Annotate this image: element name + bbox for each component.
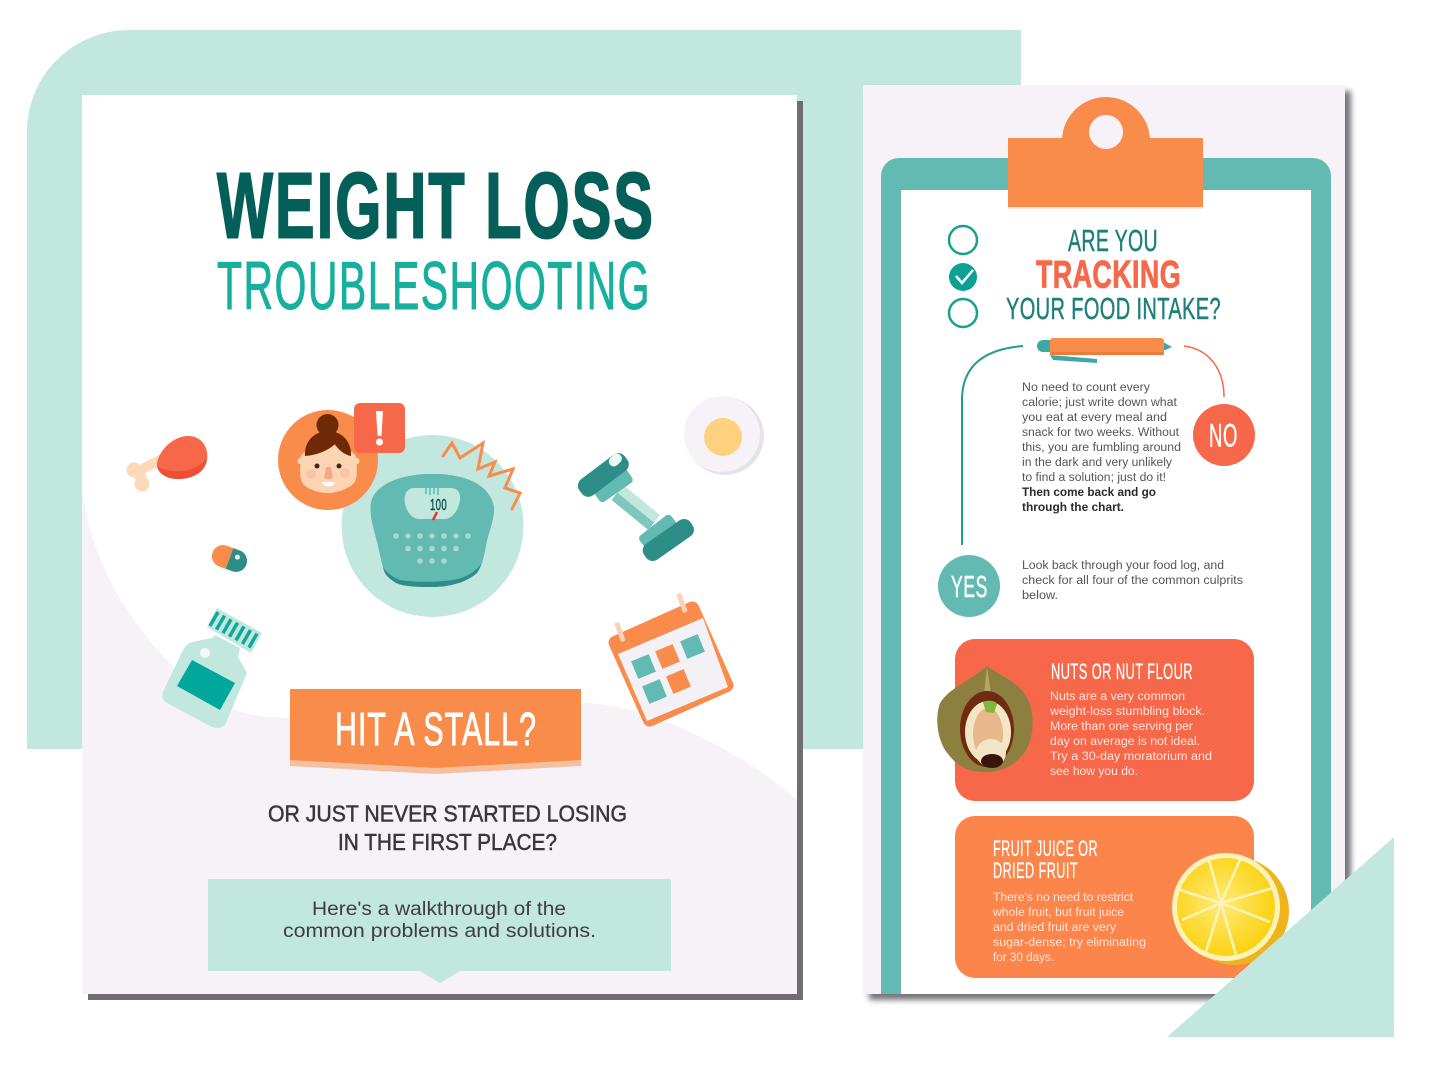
text: yes answer instructions [1022, 560, 1243, 602]
icon: fried egg [684, 396, 764, 475]
banner: hit a stall [290, 689, 581, 774]
icon: scale backdrop disc [342, 435, 524, 617]
text: no answer instructions: No need to count every [1022, 382, 1150, 394]
heading: are you tracking: ARE YOU [1068, 223, 1158, 258]
subheading: IN THE FIRST PLACE? [338, 829, 557, 855]
badge: yes: YES [951, 569, 988, 604]
title: TROUBLESHOOTING [217, 248, 651, 324]
arrow: no branch [1184, 346, 1224, 397]
text: no answer instructions: snack for two weeks. Without [1022, 427, 1180, 439]
title: WEIGHT LOSS [217, 154, 655, 258]
icon: zigzag shake [443, 443, 520, 509]
checklist icons [949, 226, 977, 327]
card: fruit juice or dried fruit: for 30 days. [993, 952, 1054, 964]
callout: walkthrough note: common problems and solutions. [283, 921, 596, 942]
icon: alert badge [354, 403, 405, 453]
arrow: yes branch [962, 346, 1023, 545]
subheading [268, 800, 627, 855]
heading: are you tracking: YOUR FOOD INTAKE? [1006, 291, 1221, 326]
icon: calendar [606, 593, 736, 729]
text: no answer instructions: Then come back and go [1022, 487, 1156, 499]
card: fruit juice or dried fruit: sugar-dense; try eliminating [993, 937, 1146, 949]
text: no answer instructions: to find a solution; just do it! [1022, 472, 1166, 484]
text: yes answer instructions: Look back through your food log, and [1022, 560, 1224, 572]
heading: are you tracking [1006, 223, 1221, 326]
card: nuts or nut flour [955, 639, 1254, 801]
text: no answer instructions: in the dark and very unlikely [1022, 457, 1172, 469]
text: no answer instructions: through the chart. [1022, 502, 1124, 514]
title [217, 154, 655, 324]
card: fruit juice or dried fruit: FRUIT JUICE OR [993, 836, 1098, 861]
icon: supplement bottle [162, 608, 262, 728]
card: nuts or nut flour: day on average is not ideal. [1050, 736, 1200, 748]
icon: pen [1037, 338, 1172, 363]
icon: pill [209, 542, 250, 575]
card: fruit juice or dried fruit: DRIED FRUIT [993, 858, 1078, 883]
card: nuts or nut flour: Nuts are a very common [1050, 691, 1185, 703]
mint background shape [27, 30, 1021, 749]
card: fruit juice or dried fruit [955, 816, 1254, 978]
card: fruit juice or dried fruit: whole fruit, but fruit juice [992, 907, 1124, 919]
image: lemon slice [1172, 853, 1289, 965]
badge: no [1193, 404, 1255, 466]
image: cracked nut [937, 666, 1033, 772]
banner: hit a stall: HIT A STALL? [335, 703, 537, 755]
text: no answer instructions [1022, 382, 1181, 514]
badge: no: NO [1209, 418, 1238, 454]
card: nuts or nut flour: NUTS OR NUT FLOUR [1051, 659, 1193, 684]
panel: weight loss poster [82, 95, 803, 1000]
text: no answer instructions: calorie; just write down what [1022, 397, 1178, 409]
icon: bathroom scale [371, 474, 494, 587]
scale reading: 100 [430, 497, 447, 514]
card: nuts or nut flour: weight-loss stumbling block. [1049, 706, 1205, 718]
icon: dumbbell [575, 450, 697, 564]
text: no answer instructions: you eat at every meal and [1022, 412, 1167, 424]
card: nuts or nut flour: More than one serving per [1050, 721, 1193, 733]
card: fruit juice or dried fruit: and dried fruit are very [993, 922, 1116, 934]
icon: chicken leg [126, 436, 207, 492]
panel: food tracking clipboard [863, 85, 1351, 1000]
card: nuts or nut flour: Try a 30-day moratorium and [1050, 751, 1212, 763]
text: yes answer instructions: check for all four of the common culprits [1022, 575, 1243, 587]
text: no answer instructions: this, you are fumbling around [1022, 442, 1181, 454]
mint corner triangle [1167, 837, 1394, 1037]
badge: yes [938, 555, 1000, 617]
callout: walkthrough note: Here's a walkthrough of the [312, 899, 566, 920]
callout: walkthrough note [208, 879, 671, 983]
icon: clipboard clip [1008, 97, 1203, 209]
icon: woman avatar [278, 410, 378, 510]
card: nuts or nut flour: see how you do. [1050, 766, 1138, 778]
subheading: OR JUST NEVER STARTED LOSING [268, 800, 627, 826]
text: yes answer instructions: below. [1022, 590, 1058, 602]
card: fruit juice or dried fruit: There's no need to restrict [993, 892, 1134, 904]
heading: are you tracking: TRACKING [1036, 254, 1181, 296]
